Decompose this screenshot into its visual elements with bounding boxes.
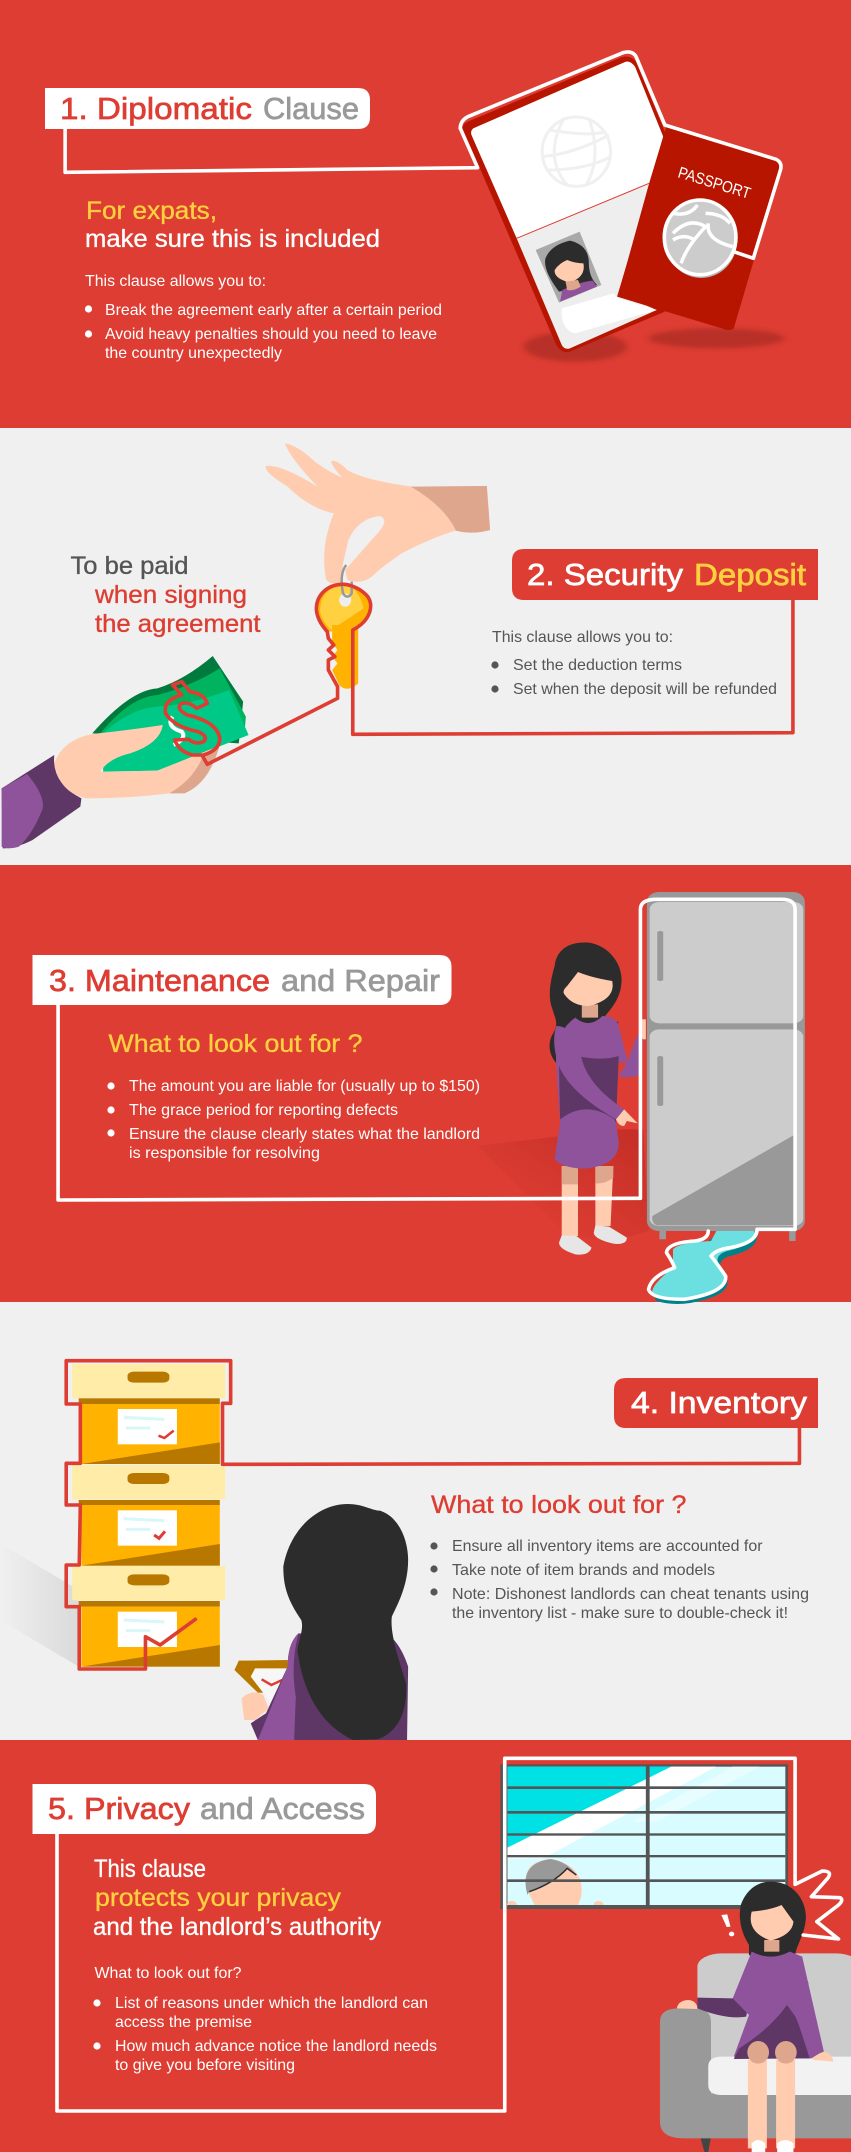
text block [107,1078,480,1162]
heading label: 4. Inventory [631,1385,808,1420]
text block: Set the deduction terms [513,657,682,674]
icon: box stack [72,1364,225,1667]
subheading: This clause [94,1855,206,1883]
heading label [32,1784,376,1834]
text block: How much advance notice the landlord needs [115,2038,437,2055]
icon: exclamation mark [721,1914,734,1936]
panel: 1 Diplomatic Clause [0,0,851,428]
text block: The grace period for reporting defects [129,1102,398,1119]
panel: 4 Inventory [0,1302,851,1740]
heading label [512,549,818,600]
label: PASSPORT: PASSPORT [676,165,753,203]
note: when to pay [70,552,261,638]
heading label: 1. Diplomatic [60,91,252,126]
icon: water puddle [652,1231,757,1304]
icon: banknotes [92,656,249,772]
text block: is responsible for resolving [129,1145,320,1162]
heading label [614,1378,818,1428]
figure: seated woman [677,1882,833,2152]
text block: access the premise [115,2014,252,2031]
illustration: passport [65,52,784,362]
icon: hand with money [2,725,219,848]
text block: Ensure all inventory items are accounted for [452,1538,763,1555]
note: when to pay: To be paid [70,552,188,580]
text block: Break the agreement early after a certain period [105,302,442,319]
icon: cover globe [664,200,737,278]
subheading: protects your privacy [95,1884,342,1912]
text block [430,1538,809,1622]
subheading: What to look out for ? [431,1491,686,1519]
subheading [93,1855,381,1941]
panel: 2 Security Deposit [0,428,851,865]
text block: to give you before visiting [115,2057,295,2074]
photo: girl portrait [536,232,601,303]
text block: The amount you are liable for (usually up to $150) [129,1078,480,1095]
illustration: key and money [2,443,793,848]
figure: woman [550,942,646,1255]
text block: This clause allows you to: [85,273,266,290]
subheading [85,197,380,253]
illustration: boxes and woman [0,1361,799,1740]
figure: woman from behind [234,1504,408,1740]
icon: fridge [647,892,805,1241]
panel: 5 Privacy and Access [0,1740,851,2152]
heading label: Deposit [694,557,806,592]
heading label: Clause [263,91,359,126]
subheading: What to look out for ? [108,1030,362,1058]
text block: Ensure the clause clearly states what the landlord [129,1126,480,1143]
text block: Avoid heavy penalties should you need to leave [105,326,437,343]
text block: What to look out for? [94,1965,242,1982]
heading label: 5. Privacy [48,1791,191,1826]
icon: key [317,565,371,689]
text block [93,1965,437,2074]
illustration: fridge and woman [58,892,805,1304]
subheading: For expats, [86,197,217,225]
heading label: and Access [200,1791,365,1826]
note: when to pay: the agreement [95,610,261,638]
text block [85,273,442,362]
icon: window [500,1764,788,1909]
figure: landlord peeking [507,1859,604,1908]
subheading: and the landlord’s authority [93,1913,381,1941]
heading label [32,955,452,1005]
heading label: and Repair [281,963,440,998]
text block: Set when the deposit will be refunded [513,681,777,698]
panel: 3 Maintenance and Repair [0,865,851,1304]
text block: List of reasons under which the landlord can [115,1995,428,2012]
icon: page globe [542,117,611,186]
illustration: window and sofa [57,1758,851,2152]
icon: hand holding key [266,443,490,584]
text block: Take note of item brands and models [452,1562,715,1579]
icon: sofa [660,1953,851,2152]
note: when to pay: when signing [94,581,247,609]
text block [491,629,777,698]
text block: the inventory list - make sure to double-check it! [452,1605,788,1622]
text block: the country unexpectedly [105,345,282,362]
heading label: 2. Security [527,557,684,592]
heading label [45,88,370,129]
heading label: 3. Maintenance [49,963,270,998]
text block: Note: Dishonest landlords can cheat tenants using [452,1586,809,1603]
text block: This clause allows you to: [492,629,673,646]
subheading: make sure this is included [85,225,380,253]
